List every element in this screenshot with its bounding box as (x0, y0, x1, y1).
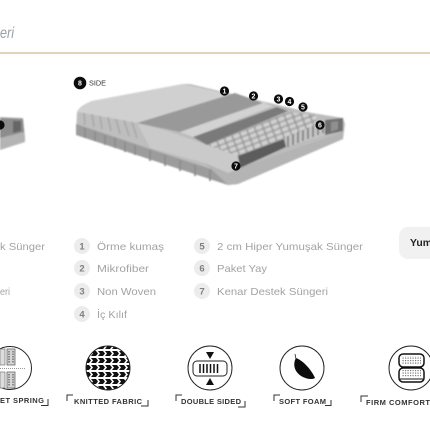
legend item 6: Paket Yay (217, 263, 268, 275)
legend item 6 (194, 260, 268, 276)
layer marker 6 (315, 120, 325, 130)
layer marker 1 (220, 86, 229, 96)
layer marker 4 (285, 97, 294, 106)
side label (74, 77, 106, 89)
legend item 5: 5 (199, 242, 205, 252)
layer marker 4: 4 (288, 99, 292, 106)
layer marker 6: 6 (318, 122, 322, 130)
layer marker 7: 7 (234, 164, 238, 170)
legend item 4: İç Kılıf (97, 308, 127, 321)
heading fragment: eri (0, 25, 14, 42)
side label: 8 (78, 80, 82, 88)
legend item 2 (74, 260, 150, 276)
legend item 6: 6 (199, 264, 205, 274)
side label: SIDE (89, 78, 106, 88)
layer marker 1: 1 (223, 88, 227, 96)
legend item 7 (194, 283, 328, 299)
legend item 1: Örme kumaş (97, 241, 164, 253)
legend item 2: 2 (79, 264, 85, 274)
caption: soft foam: SOFT FOAM (279, 397, 326, 406)
legend item 1: 1 (79, 242, 85, 252)
icon: pocket spring (0, 346, 32, 390)
layer marker 2 (249, 91, 258, 101)
caption: soft foam (274, 395, 331, 406)
caption: knitted fabric: KNITTED FABRIC (74, 397, 143, 406)
firmness tab (399, 227, 430, 259)
gold divider (0, 52, 430, 54)
caption: double sided (176, 395, 245, 407)
legend item 3: Non Woven (97, 286, 156, 298)
legend fragment: left column (0, 241, 46, 298)
legend item 5 (194, 238, 364, 254)
layer marker 3: 3 (277, 96, 281, 104)
caption: knitted fabric (67, 395, 148, 406)
icon: soft foam feather (280, 346, 324, 390)
legend: column one (74, 238, 164, 322)
caption: firm comfort: FIRM COMFORT (366, 398, 430, 407)
legend item 3 (74, 283, 156, 299)
legend item 2: Mikrofiber (97, 263, 150, 275)
legend fragment: left column: k Sünger (0, 241, 46, 253)
icon: firm comfort (389, 346, 430, 390)
legend item 7: Kenar Destek Süngeri (217, 286, 328, 298)
legend: column two (194, 238, 364, 299)
layer marker 3 (274, 94, 283, 104)
layer marker 5 (298, 102, 308, 112)
layer marker 5: 5 (301, 104, 305, 112)
mattress cutaway (76, 84, 345, 185)
legend fragment: left column: eri (0, 286, 10, 298)
legend item 5: 2 cm Hiper Yumuşak Sünger (217, 241, 364, 253)
icon: double sided (188, 346, 232, 390)
icon: knitted fabric (86, 346, 130, 390)
layer marker 2: 2 (252, 94, 256, 100)
legend item 7: 7 (199, 286, 205, 298)
legend item 4: 4 (79, 310, 85, 320)
caption: pocket spring: ET SPRING (0, 396, 44, 405)
cropped mattress left (0, 117, 25, 150)
legend item 4 (74, 306, 127, 322)
legend item 3: 3 (79, 286, 85, 298)
caption: double sided: DOUBLE SIDED (181, 397, 242, 406)
layer marker 7 (231, 161, 241, 171)
legend item 1 (74, 238, 164, 254)
